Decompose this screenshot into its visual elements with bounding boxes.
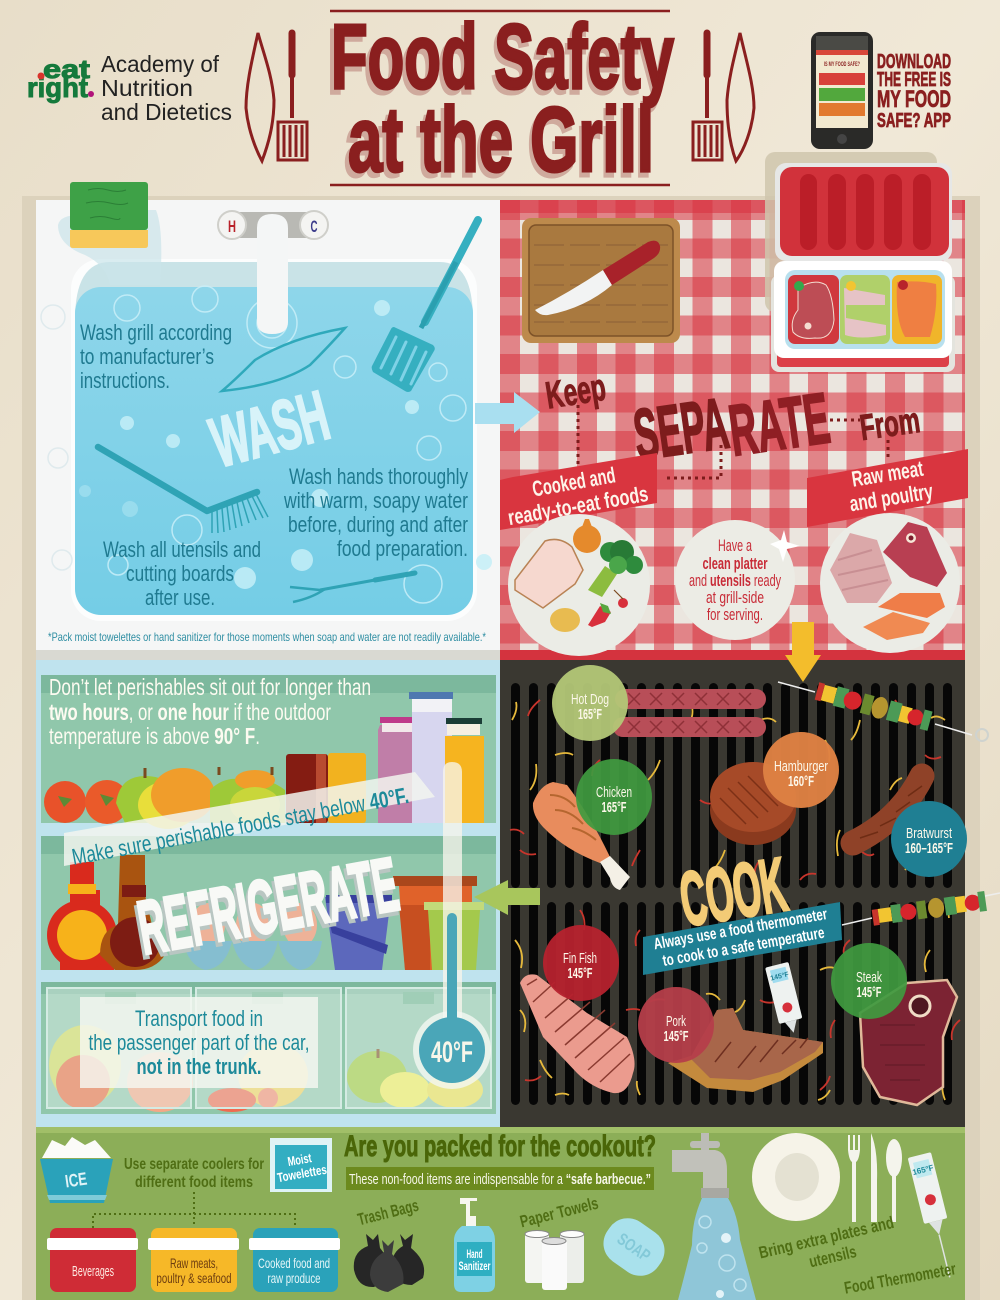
icon: spatula — [372, 220, 478, 392]
dotted connectors — [578, 405, 888, 478]
banner: below 40F: Make sure perishable foods stay below 40°F. — [70, 782, 411, 870]
circle: chicken: Chicken — [596, 784, 632, 801]
food: bratwurst — [853, 776, 922, 843]
text: perishables: temperature is above 90° F. — [49, 723, 260, 749]
logo: Academy of Nutrition and Dietetics: Nutrition — [101, 75, 193, 101]
food: pork chop — [668, 1008, 823, 1092]
icon: moist towelettes — [270, 1138, 332, 1192]
text: hands: food preparation. — [337, 536, 468, 561]
icon: cooler cooked food: raw produce — [268, 1270, 321, 1286]
icon: faucet: H — [228, 217, 236, 236]
label: paper towels: Paper Towels — [518, 1194, 600, 1231]
text: plates and utensils — [757, 1213, 900, 1282]
text box: transport: the passenger part of the car, — [88, 1030, 310, 1055]
icon: cooler cooked food: Cooked food and — [258, 1255, 330, 1271]
plate: raw meat — [820, 513, 960, 653]
plate: clean platter: Have a — [718, 536, 752, 555]
heading: SEPARATE: SEPA — [629, 384, 733, 476]
title: at the Grill — [348, 89, 654, 191]
shelf: drawers — [41, 982, 496, 1114]
icon: cutting board — [522, 218, 680, 343]
banner: raw meat: and poultry — [848, 478, 935, 516]
icon: skewer bottom — [842, 891, 1000, 927]
icon: ice bucket: ICE — [64, 1169, 88, 1191]
icon: tongs in water — [222, 328, 345, 391]
label: Keep: Keep — [543, 367, 609, 418]
title: Food Safety — [327, 11, 672, 113]
icon: soap — [595, 1210, 673, 1284]
text: utensils — [103, 537, 261, 610]
banner: raw meat: Raw meat — [850, 456, 925, 492]
icon: scrub brush — [98, 447, 268, 533]
app download text: MY FOOD — [877, 86, 951, 113]
text: grill: Wash grill according — [80, 320, 232, 345]
icon: grill thermometer — [765, 962, 805, 1036]
icon: faucet and water — [672, 1133, 756, 1300]
icon: cooler raw meats — [148, 1228, 239, 1292]
food: steak — [860, 980, 957, 1105]
heading: REFRIGERATE — [129, 842, 405, 976]
food: chicken leg — [533, 782, 630, 890]
heading: REFRIGERATE: REFRIGERATE — [132, 842, 405, 971]
logo: Academy of Nutrition and Dietetics: and Dietetics — [101, 99, 232, 125]
subheading band: These non-food items are indispensable for a “safe barbecue.” — [349, 1171, 651, 1188]
text: utensils: cutting boards — [126, 561, 234, 586]
icon: cooler beverages: Beverages — [72, 1263, 114, 1280]
icon: soap: SOAP — [614, 1229, 654, 1266]
logo: Academy of Nutrition and Dietetics — [27, 51, 232, 125]
heading: packed: Are you packed for the cookout? — [344, 1130, 656, 1163]
food: fin fish — [520, 974, 635, 1093]
icon: left tongs and spatula — [246, 33, 307, 161]
text: grill: instructions. — [80, 368, 170, 393]
text: separate coolers: Use separate coolers for — [124, 1156, 264, 1173]
plate: clean platter — [675, 520, 800, 640]
text: plates and utensils: utensils — [807, 1242, 858, 1271]
icon: phone app — [811, 32, 873, 149]
icon: paper towels — [525, 1230, 584, 1290]
banner: thermometer tip: Always use a food thermometer — [652, 906, 829, 953]
circle: steak: 145°F — [856, 984, 882, 1001]
icon: ice bucket — [40, 1137, 113, 1203]
text box: transport — [80, 997, 318, 1088]
panel: cook: COOK — [674, 842, 792, 943]
icon: hand sanitizer: Sanitizer — [458, 1259, 491, 1273]
circle: hamburger — [763, 732, 839, 808]
banner: cooked foods: Cooked and — [530, 462, 617, 502]
text: utensils: after use. — [145, 585, 215, 610]
label: trash bags: Trash Bags — [356, 1196, 420, 1229]
icon: cooler cooked food — [249, 1228, 340, 1292]
icon: faucet: C — [310, 217, 318, 236]
panel: separate — [500, 152, 968, 662]
title — [327, 6, 674, 196]
panel: packed for the cookout — [36, 1127, 965, 1300]
circle: pork — [638, 987, 714, 1063]
circle: chicken — [576, 759, 652, 835]
text: separate coolers — [124, 1156, 264, 1191]
circle: fin fish — [543, 925, 619, 1001]
heading: WASH: WASH — [203, 376, 337, 482]
banner: thermometer tip: to cook to a safe temperature — [661, 925, 826, 970]
title: Food Safety — [331, 6, 674, 108]
arrow: wash to separate — [475, 392, 540, 433]
plate: clean platter: for serving. — [707, 605, 763, 624]
icon: right tongs and spatula — [693, 33, 754, 161]
circle: bratwurst: Bratwurst — [906, 825, 953, 842]
heading: SEPARATE: RATE — [724, 378, 834, 472]
circle: hot dog — [552, 665, 628, 741]
icon: grill thermometer: 145°F — [770, 970, 790, 983]
circle: fin fish: 145°F — [568, 965, 592, 982]
subheading band — [346, 1167, 654, 1190]
food: hot dogs — [613, 689, 766, 737]
icon: thermometer — [908, 1152, 961, 1280]
plate: clean platter: and utensils ready — [689, 571, 781, 590]
logo: Academy of Nutrition and Dietetics: right — [27, 72, 88, 103]
header — [27, 6, 951, 196]
text: perishables: Don’t let perishables sit out for longer than — [49, 674, 371, 700]
circle: hot dog: 165°F — [578, 706, 602, 723]
icon: phone app: IS MY FOOD SAFE? — [824, 62, 860, 68]
circle: hamburger: 160°F — [788, 773, 814, 790]
panel: wash — [36, 182, 500, 660]
icon: sponge — [70, 182, 148, 248]
temperature circles — [543, 665, 967, 1063]
icon: moist towelettes: Moist — [286, 1150, 313, 1169]
panel: cook — [500, 660, 967, 1127]
text: grill: to manufacturer’s — [80, 344, 214, 369]
icon: thermometer: 165°F — [912, 1163, 935, 1177]
text: plates and utensils: Bring extra plates and — [757, 1213, 896, 1262]
app download text — [877, 51, 951, 132]
banner: cooked foods — [500, 453, 657, 530]
logo: Academy of Nutrition and Dietetics: Academy of — [101, 51, 220, 77]
food: hamburger — [710, 762, 796, 845]
plate: cooked foods — [508, 514, 650, 656]
app download text: THE FREE IS — [877, 69, 951, 91]
icon: plate and cutlery — [752, 1133, 902, 1222]
text box: transport: Transport food in — [135, 1006, 263, 1031]
icon: knife — [535, 241, 660, 315]
text: grill — [80, 320, 232, 393]
app download text: SAFE? APP — [877, 110, 951, 132]
app download text: DOWNLOAD — [877, 51, 951, 73]
shelf: top — [41, 675, 496, 829]
arrow: separate to cook — [785, 622, 821, 682]
title: at the Grill — [344, 94, 652, 196]
circle: bratwurst — [891, 801, 967, 877]
icon: skewer top — [778, 680, 988, 741]
icon: big thermometer: 40°F — [431, 1036, 473, 1069]
text: utensils: Wash all utensils and — [103, 537, 261, 562]
circle: pork: Pork — [666, 1013, 686, 1030]
arrow: cook to refrigerate — [474, 880, 540, 915]
icon: big thermometer — [413, 762, 491, 1089]
text: hands: Wash hands thoroughly — [289, 464, 468, 489]
icon: cooler raw meats: poultry & seafood — [156, 1270, 232, 1286]
footnote: *Pack moist towelettes or hand sanitizer for those moments when soap and water are not readily available.* — [48, 630, 486, 644]
label: food thermometer: Food Thermometer — [843, 1259, 958, 1298]
plate: clean platter: clean platter — [702, 554, 768, 573]
text: perishables: two hours, or one hour if the outdoor — [49, 699, 331, 725]
icon: trash bags — [354, 1234, 424, 1292]
text: perishables — [49, 674, 371, 749]
circle: fin fish: Fin Fish — [563, 950, 597, 967]
circle: hot dog: Hot Dog — [571, 691, 609, 708]
icon: hand sanitizer — [454, 1198, 495, 1292]
circle: chicken: 165°F — [602, 799, 626, 816]
icon: fork — [290, 573, 415, 602]
circle: steak: Steak — [856, 969, 882, 986]
text box: transport: not in the trunk. — [136, 1054, 262, 1079]
text: hands — [283, 464, 468, 561]
icon: faucet — [218, 211, 328, 334]
circle: hamburger: Hamburger — [774, 758, 828, 775]
text: separate coolers: different food items — [135, 1174, 253, 1191]
icon: cooler beverages — [47, 1228, 138, 1292]
text: hands: with warm, soapy water — [283, 488, 468, 513]
text: hands: before, during and after — [288, 512, 468, 537]
icon: cooler raw meats: Raw meats, — [170, 1255, 218, 1271]
banner: raw meat — [807, 449, 968, 527]
sink basin — [41, 210, 492, 621]
heading: REFRIGERATE: REFRIGERATE — [130, 846, 402, 976]
banner: thermometer tip — [643, 902, 842, 975]
icon: hand sanitizer: Hand — [466, 1247, 482, 1261]
label: From: From — [857, 399, 922, 448]
icon: meat tray and cooler — [765, 152, 955, 372]
circle: pork: 145°F — [664, 1028, 688, 1045]
banner: cooked foods: ready-to-eat foods — [506, 481, 650, 530]
circle: bratwurst: 160–165°F — [905, 840, 953, 857]
logo: Academy of Nutrition and Dietetics: eat — [43, 54, 90, 84]
icon: moist towelettes: Towelettes — [276, 1162, 328, 1185]
shelf: middle — [41, 836, 496, 970]
panel: refrigerate — [36, 660, 500, 1127]
circle: steak — [831, 943, 907, 1019]
plate: clean platter: at grill-side — [706, 588, 764, 607]
